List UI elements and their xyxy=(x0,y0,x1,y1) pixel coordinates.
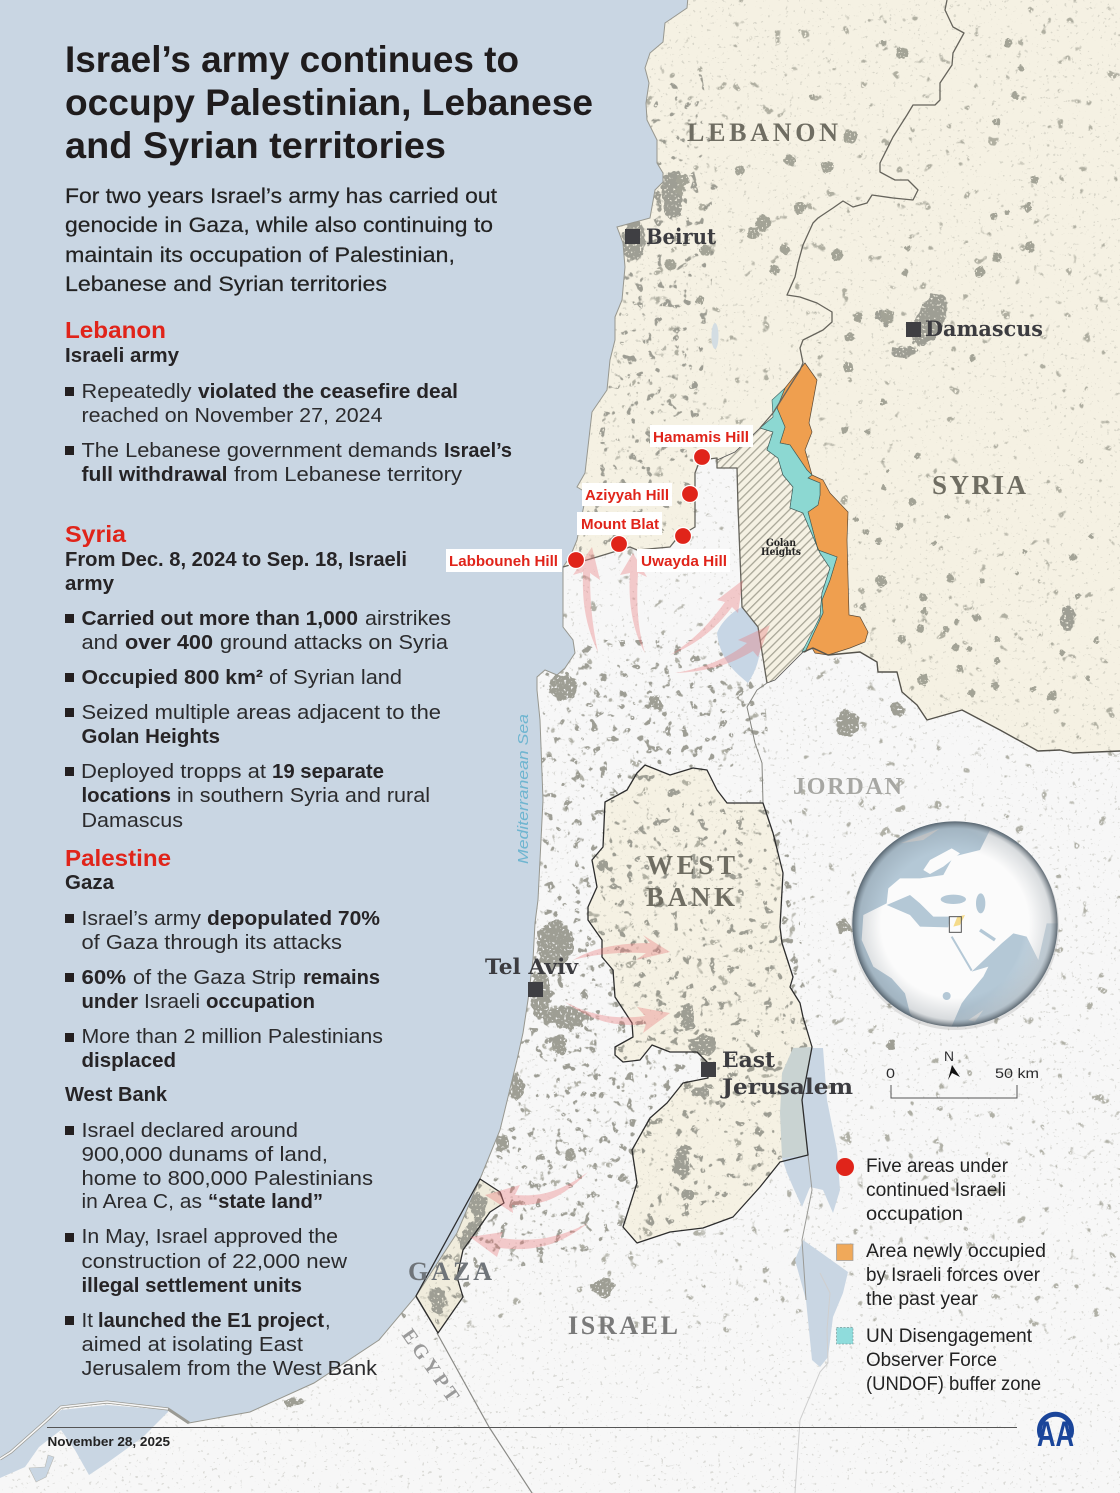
bullet: settlement units: illegal settlement units xyxy=(82,1275,302,1297)
bullet: state land: Israel declared around xyxy=(82,1120,298,1142)
bullet: troops: Damascus xyxy=(82,810,183,832)
bullet: settlement units xyxy=(65,1226,348,1297)
section: Palestine xyxy=(65,845,383,1380)
region: Gaza Strip xyxy=(416,1179,504,1333)
bullet: Golan: Seized multiple areas adjacent to the xyxy=(82,702,441,724)
occupied point: Uwayda Hill: Uwayda Hill xyxy=(641,553,727,570)
water: Sea of Galilee xyxy=(717,607,760,683)
bullet: troops: 19 separate xyxy=(272,761,384,783)
city: Beirut: Beirut xyxy=(646,225,716,250)
map label: Golan Heights: Heights xyxy=(761,547,801,558)
bullet: E1 project: Jerusalem from the West Bank xyxy=(82,1358,378,1380)
map labels: countries: ISRAEL xyxy=(568,1311,678,1340)
city: Tel Aviv: Tel Aviv xyxy=(485,955,580,980)
bullet: E1 project: aimed at isolating East xyxy=(82,1334,303,1356)
intro paragraph: maintain its occupation of Palestinian, xyxy=(65,244,455,267)
legend item: newly occupied xyxy=(836,1241,1046,1310)
title: occupy Palestinian, Lebanese xyxy=(65,82,593,123)
legend item: buffer zone: Observer Force xyxy=(866,1350,997,1371)
occupied point: Uwayda Hill xyxy=(637,528,730,572)
bullet: ceasefire: Repeatedly xyxy=(82,381,192,403)
section: Lebanon xyxy=(65,317,512,486)
map labels: countries: SYRIA xyxy=(932,470,1026,500)
subheading: Gaza: Gaza xyxy=(65,872,115,894)
map label: Golan Heights: Golan xyxy=(766,538,797,549)
occupied point: Hamamis Hill xyxy=(650,425,753,466)
bullet: troops xyxy=(65,761,430,832)
date: November 28, 2025 xyxy=(48,1434,170,1449)
map label: Golan Heights xyxy=(761,538,801,558)
bullet: E1 project: , xyxy=(325,1310,331,1332)
subheading: dates: From Dec. 8, 2024 to Sep. 18, Israeli xyxy=(65,549,407,571)
legend item: newly occupied: Area newly occupied xyxy=(866,1241,1046,1262)
UNDOF buffer zone xyxy=(760,388,837,652)
subheading: West Bank: West Bank xyxy=(65,1084,168,1106)
map labels: countries: EGYPT xyxy=(397,1325,464,1407)
city: East Jerusalem xyxy=(701,1048,853,1100)
bullet: withdrawal: full withdrawal xyxy=(82,464,228,486)
legend item: occupied areas: continued Israeli xyxy=(866,1180,1006,1201)
legend item: buffer zone xyxy=(836,1326,1041,1395)
bullet: displaced xyxy=(65,1026,383,1072)
bullet: settlement units: In May, Israel approved the xyxy=(82,1226,338,1248)
bullet: withdrawal xyxy=(65,440,512,486)
bullet: occupation xyxy=(65,967,380,1013)
bullet: state land: home to 800,000 Palestinians xyxy=(82,1168,373,1190)
region: West Bank xyxy=(588,765,812,1243)
bullet: airstrikes: Carried out more than 1,000 xyxy=(82,608,358,630)
bullet: ceasefire xyxy=(65,381,458,427)
bullet: withdrawal: Israel’s xyxy=(444,440,512,462)
title: Israel’s army continues to xyxy=(65,39,519,80)
bullet: occupied land: of Syrian land xyxy=(269,667,402,689)
map labels: countries: WEST xyxy=(646,850,735,880)
bullet: ceasefire: reached on November 27, 2024 xyxy=(82,405,382,427)
city: East Jerusalem: Jerusalem xyxy=(720,1075,853,1100)
locator globe xyxy=(851,821,1060,1030)
bullet: occupation: of the Gaza Strip xyxy=(133,967,296,989)
footer line xyxy=(47,1426,1017,1428)
occupied point: Aziyyah Hill: Aziyyah Hill xyxy=(585,487,669,504)
map labels: countries xyxy=(397,118,1026,1407)
bullet: Golan xyxy=(65,702,441,748)
bullet: ceasefire: violated the ceasefire deal xyxy=(198,381,458,403)
bullet: withdrawal: from Lebanese territory xyxy=(234,464,462,486)
map labels: countries: GAZA xyxy=(408,1257,492,1286)
bullet: state land: 900,000 dunams of land, xyxy=(82,1144,328,1166)
map labels: countries: LEBANON xyxy=(687,118,838,147)
map labels: countries: JORDAN xyxy=(793,774,903,800)
legend item: newly occupied: the past year xyxy=(866,1289,979,1310)
water: Mediterranean Sea xyxy=(0,0,688,1482)
legend item: buffer zone: UN Disengagement xyxy=(866,1326,1033,1347)
legend item: occupied areas xyxy=(836,1156,1009,1225)
map label: Mediterranean Sea: Mediterranean Sea xyxy=(515,714,532,864)
bullet: occupation: occupation xyxy=(206,991,315,1013)
bullet: depopulated: depopulated 70% xyxy=(207,908,380,930)
scale bar: 50 km xyxy=(995,1065,1039,1081)
bullet: E1 project xyxy=(65,1310,378,1380)
bullet: withdrawal: The Lebanese government demands xyxy=(82,440,438,462)
title: and Syrian territories xyxy=(65,125,446,166)
area newly occupied by Israeli forces xyxy=(777,363,868,655)
bullet: airstrikes xyxy=(65,608,451,654)
bullet: E1 project: It xyxy=(82,1310,93,1332)
occupied point: Labbouneh Hill xyxy=(446,549,584,572)
intro paragraph: genocide in Gaza, while also continuing to xyxy=(65,214,493,237)
West Bank outline xyxy=(588,765,812,1243)
Golan Heights hatched area xyxy=(717,428,830,683)
bullet: occupation: 60% xyxy=(82,967,126,989)
movement arrows xyxy=(470,547,770,1257)
logo: AA: AA xyxy=(1037,1415,1074,1454)
bullet: occupation: remains xyxy=(303,967,380,989)
map labels: countries: BANK xyxy=(646,882,735,912)
bullet: depopulated: of Gaza through its attacks xyxy=(82,932,342,954)
legend item: occupied areas: occupation xyxy=(866,1204,963,1225)
occupied point: Aziyyah Hill xyxy=(582,483,698,506)
bullet: airstrikes: over 400 xyxy=(125,632,213,654)
intro paragraph: For two years Israel’s army has carried out xyxy=(65,185,497,208)
scale bar: 0 xyxy=(886,1065,895,1081)
bullet: state land: “state land” xyxy=(208,1191,323,1213)
title xyxy=(65,39,593,166)
legend item: occupied areas: Five areas under xyxy=(866,1156,1009,1177)
section: Syria xyxy=(65,521,451,832)
bullet: airstrikes: airstrikes xyxy=(365,608,451,630)
legend item: newly occupied: by Israeli forces over xyxy=(866,1265,1041,1286)
legend xyxy=(836,1156,1046,1395)
bullet: Golan: Golan Heights xyxy=(82,726,220,748)
bullet: occupied land xyxy=(65,667,402,689)
bullet: displaced: More than 2 million Palestinians xyxy=(82,1026,383,1048)
north arrow xyxy=(944,1048,960,1080)
bullet: troops: Deployed tropps at xyxy=(81,761,266,783)
city: Damascus: Damascus xyxy=(925,317,1043,342)
region: Lebanon and Syria xyxy=(563,0,1120,753)
bullet: occupied land: Occupied 800 km² xyxy=(82,667,263,689)
occupied point: Labbouneh Hill: Labbouneh Hill xyxy=(449,553,558,570)
occupied point: Hamamis Hill: Hamamis Hill xyxy=(653,429,749,446)
Gaza Strip outline xyxy=(416,1179,504,1333)
heading: Lebanon: Lebanon xyxy=(65,317,166,343)
borders xyxy=(416,0,1120,1493)
bullet: airstrikes: ground attacks on Syria xyxy=(220,632,449,654)
bullet: troops: locations xyxy=(82,785,171,807)
bullet: displaced: displaced xyxy=(82,1050,176,1072)
intro paragraph xyxy=(65,185,497,296)
north arrow: N xyxy=(944,1048,954,1064)
subheading: dates: army xyxy=(65,573,115,595)
subheading: dates xyxy=(65,549,407,595)
city: Tel Aviv xyxy=(485,955,580,997)
bullet: occupation: Israeli xyxy=(144,991,200,1013)
occupied point: Mount Blat: Mount Blat xyxy=(581,516,659,533)
bullet: airstrikes: and xyxy=(82,632,118,654)
bullet: depopulated xyxy=(65,908,380,954)
heading: Palestine: Palestine xyxy=(65,845,171,871)
bullet: state land: in Area C, as xyxy=(82,1191,202,1213)
legend item: buffer zone: (UNDOF) buffer zone xyxy=(866,1374,1041,1395)
scale bar xyxy=(886,1065,1039,1098)
bullet: occupation: under xyxy=(82,991,138,1013)
bullet: settlement units: construction of 22,000 new xyxy=(82,1251,348,1273)
bullet: depopulated: Israel’s army xyxy=(82,908,201,930)
occupied point: Mount Blat xyxy=(577,512,662,552)
subheading: Israeli army: Israeli army xyxy=(65,345,180,367)
heading: Syria: Syria xyxy=(65,521,126,547)
bullet: troops: in southern Syria and rural xyxy=(177,785,430,807)
bullet: state land xyxy=(65,1120,373,1213)
bullet: E1 project: launched the E1 project xyxy=(98,1310,324,1332)
intro paragraph: Lebanese and Syrian territories xyxy=(65,273,387,296)
water: Lake Qaraoun xyxy=(712,323,718,349)
water: Dead Sea xyxy=(780,1047,848,1367)
city: East Jerusalem: East xyxy=(722,1048,775,1073)
